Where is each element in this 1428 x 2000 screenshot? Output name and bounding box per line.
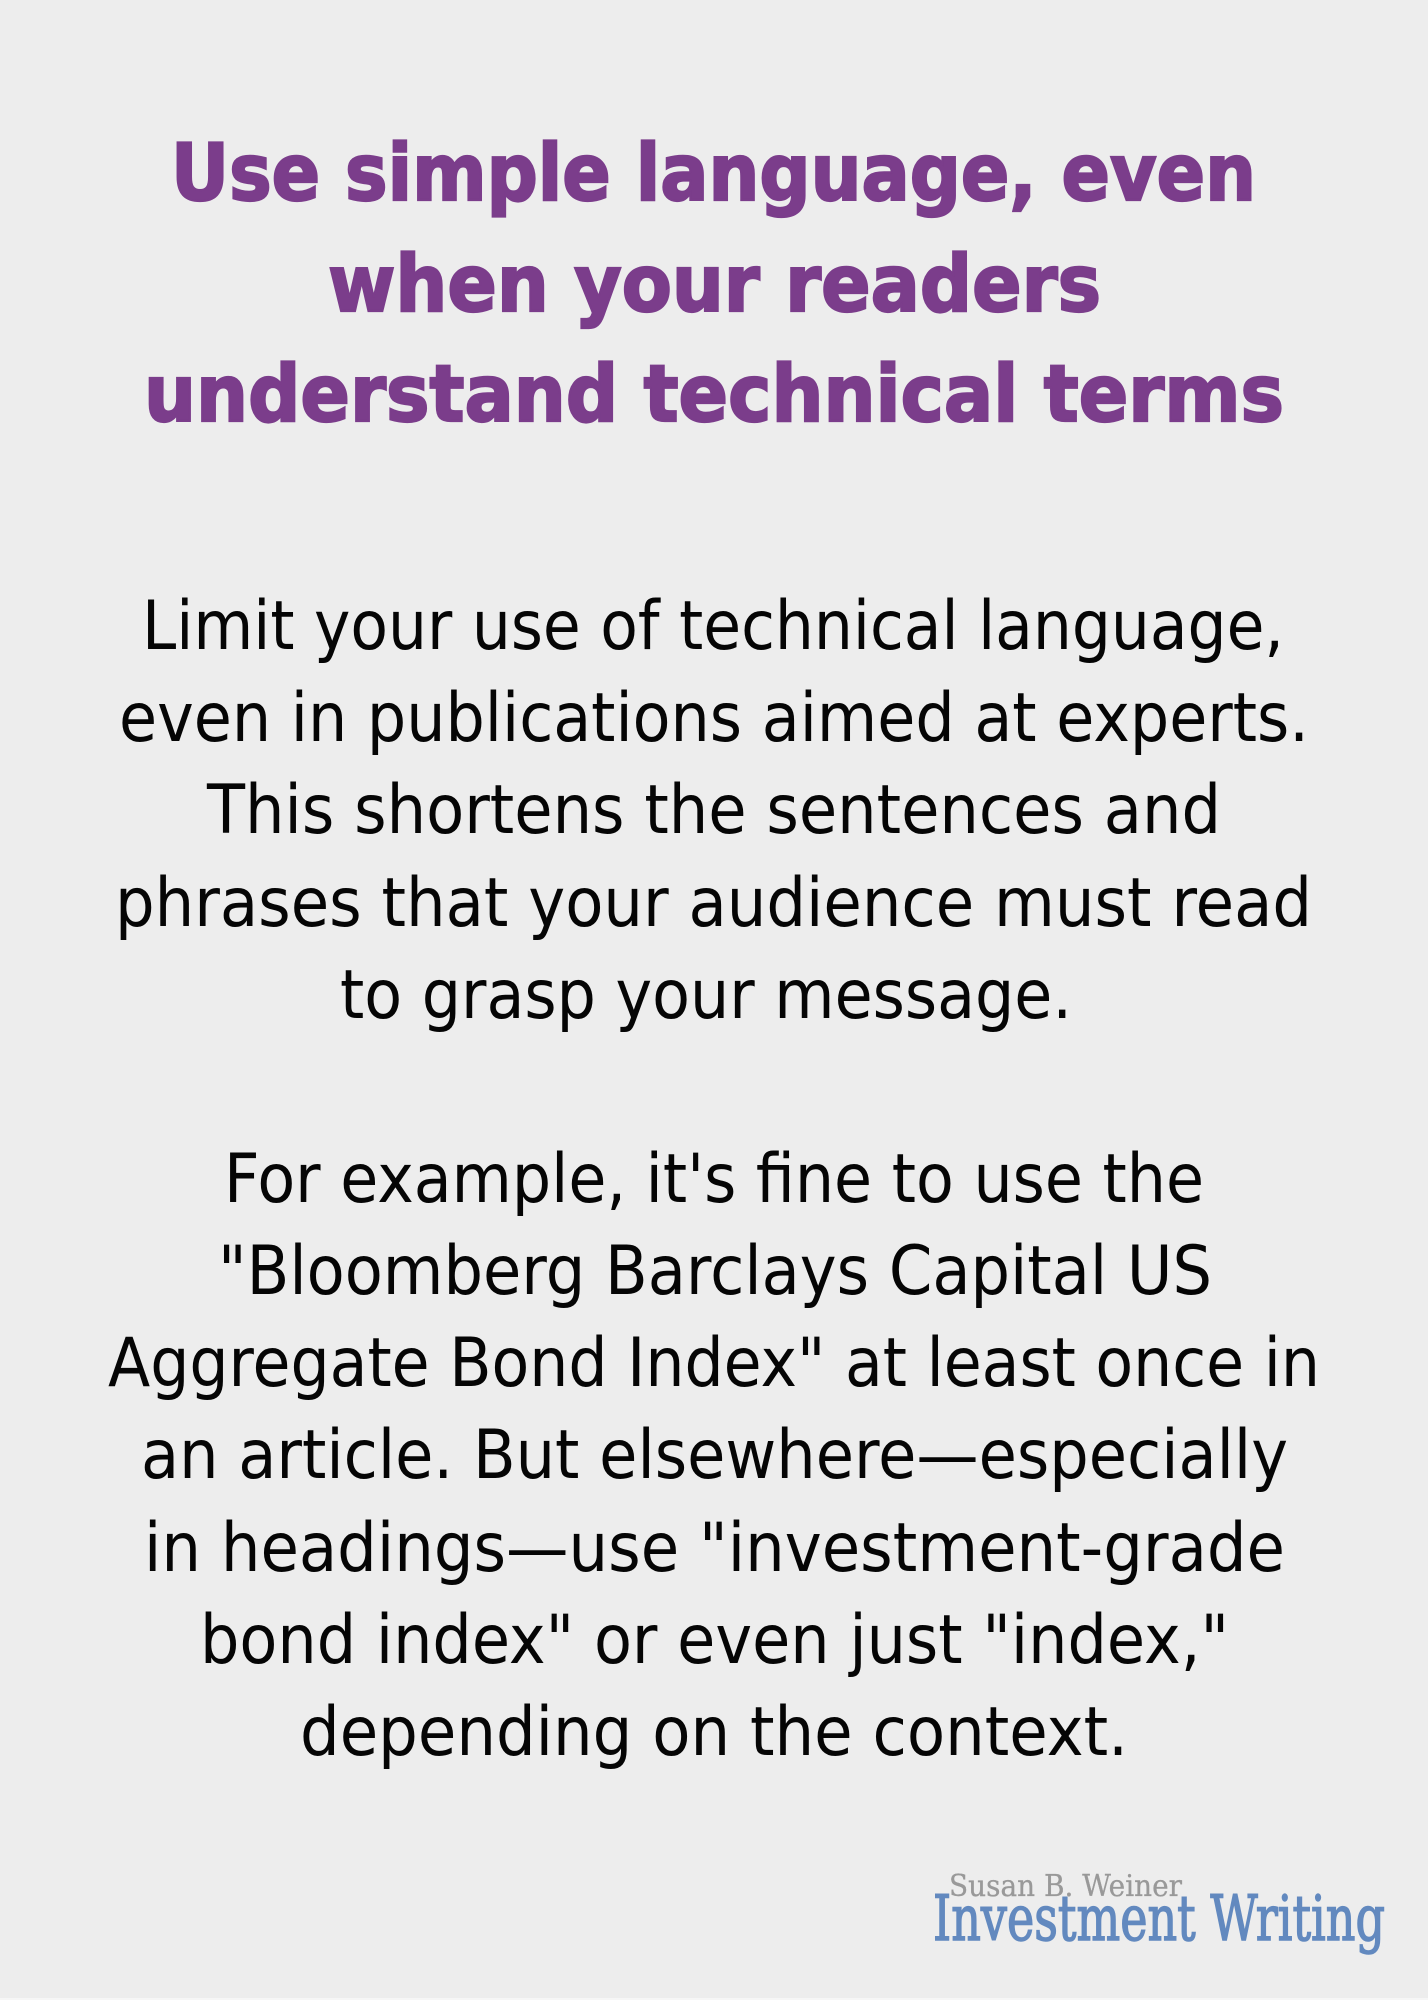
title: Use simple language, even	[171, 129, 1256, 219]
text block: first paragraph: Limit your use of technical language,	[142, 586, 1284, 665]
text block: first paragraph: even in publications aimed at experts.	[119, 678, 1309, 757]
title: understand technical terms	[144, 350, 1284, 440]
text block: second paragraph	[108, 1139, 1320, 1771]
text block: second paragraph: bond index" or even just "index,"	[200, 1600, 1229, 1679]
text block: second paragraph: Aggregate Bond Index" at least once in	[108, 1323, 1320, 1402]
text block: first paragraph: to grasp your message.	[340, 955, 1072, 1034]
text block: first paragraph	[115, 586, 1312, 1034]
text block: second paragraph: in headings—use "investment-grade	[144, 1508, 1285, 1587]
text block: second paragraph: depending on the context.	[300, 1692, 1128, 1771]
text block: first paragraph: phrases that your audience must read	[115, 863, 1312, 942]
title	[144, 129, 1284, 440]
title: when your readers	[328, 240, 1101, 330]
text block: second paragraph: an article. But elsewhere—especially	[141, 1415, 1288, 1494]
logo: Susan B. Weiner Investment Writing: Susan B. Weiner	[949, 1869, 1183, 1904]
text block: first paragraph: This shortens the sentences and	[206, 770, 1221, 849]
text block: second paragraph: "Bloomberg Barclays Capital US	[218, 1231, 1212, 1310]
text block: second paragraph: For example, it's fine to use the	[224, 1139, 1204, 1218]
